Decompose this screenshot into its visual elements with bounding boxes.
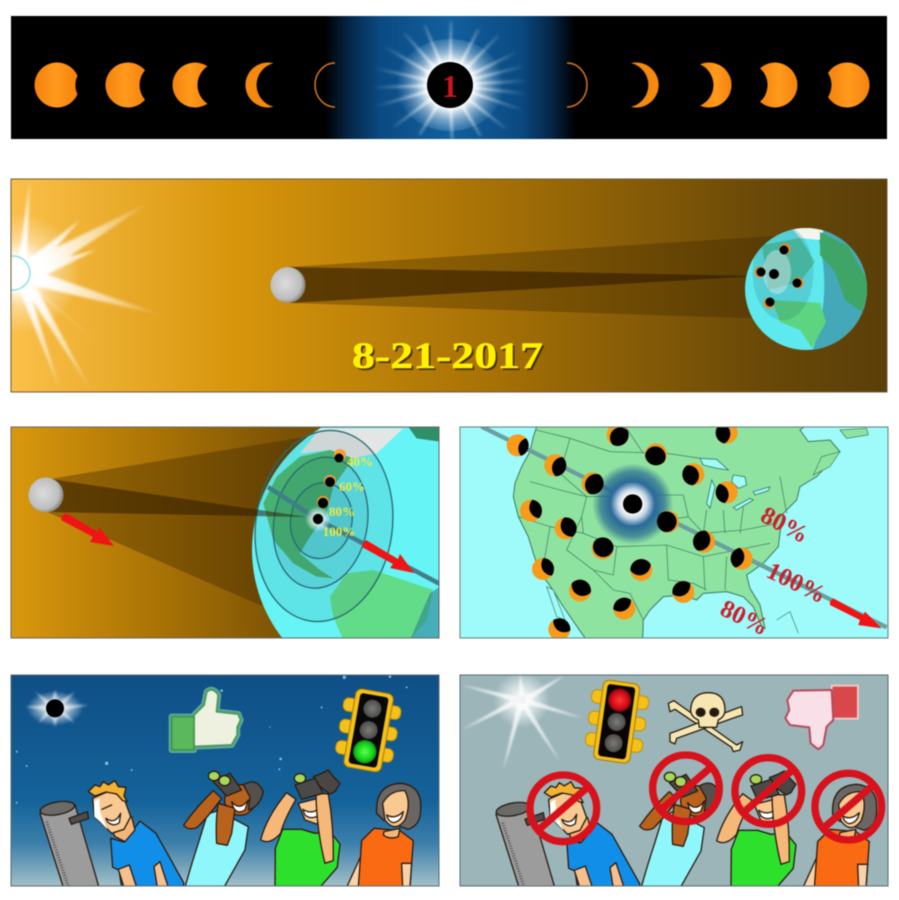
coverage labels: 100%: [323, 524, 355, 539]
icon: sun: [10, 183, 153, 384]
icon: eclipsed sun: [25, 690, 88, 727]
map land: [513, 425, 868, 640]
coverage labels: 80%: [329, 504, 355, 519]
umbra shadow: [47, 479, 307, 517]
total eclipse corona: [592, 463, 673, 545]
icon: traffic light green: [333, 686, 404, 774]
corona glow: [325, 16, 578, 139]
people with prohibited signs: [495, 755, 882, 888]
date: [352, 342, 544, 371]
panel: sun moon earth geometry: [0, 179, 887, 392]
umbra shadow: [288, 267, 760, 303]
arrow: shadow direction: [830, 598, 882, 628]
icon: skull and crossbones: [668, 693, 743, 752]
phase 8: [631, 63, 659, 108]
prohibition signs: [530, 755, 882, 842]
icon: traffic light red: [583, 678, 651, 765]
penumbra shadow: [288, 236, 775, 319]
coverage labels: [323, 454, 373, 539]
coverage labels: 80%: [716, 595, 773, 641]
arrow: shadow direction: [362, 540, 414, 573]
icon: thumbs down: [785, 686, 858, 749]
people observing: [39, 770, 421, 887]
icon: moon: [270, 267, 306, 303]
coverage labels: [720, 506, 824, 635]
partial eclipse markers: [507, 422, 753, 640]
phase 3: [172, 63, 208, 108]
phase 5: [315, 63, 335, 107]
eclipse dots on earth: [754, 244, 804, 308]
panel: eclipse phases strip: [11, 16, 887, 139]
path of totality: [268, 487, 440, 584]
panel: unsafe viewing of partial sun: [460, 672, 888, 888]
panel: safe viewing during totality: [11, 675, 439, 887]
coverage labels: 40%: [347, 454, 373, 469]
penumbra shadow: [48, 438, 306, 606]
total eclipse disc with number: [427, 62, 473, 108]
coverage labels: 100%: [762, 557, 830, 609]
phase 9: [700, 62, 732, 108]
icon: earth: [745, 226, 870, 352]
date: 8-21-2017: [354, 338, 545, 379]
phase 1: [35, 63, 78, 108]
coverage labels: 60%: [339, 479, 365, 494]
corona: [305, 506, 331, 532]
phase 11: [828, 63, 870, 108]
icon: globe: [251, 426, 440, 638]
date: 8-21-2017: [352, 336, 543, 377]
arrow: moon direction: [61, 513, 114, 546]
phase 4: [245, 63, 274, 108]
eclipse discs: [313, 449, 346, 524]
penumbra ovals: [254, 429, 394, 623]
phase 10: [760, 62, 797, 108]
coverage labels: 80%: [756, 502, 813, 549]
icon: bright sun: [462, 672, 583, 770]
phase 7: [567, 63, 587, 107]
stars: [16, 675, 408, 804]
total eclipse disc with number: 1: [442, 68, 458, 104]
panel: eclipse coverage on globe: [10, 426, 440, 638]
phase 2: [105, 62, 145, 107]
icon: thumbs up: [172, 690, 241, 750]
panel: map of north america: [460, 422, 888, 641]
icon: moon: [28, 478, 64, 512]
path of totality: [482, 427, 887, 627]
